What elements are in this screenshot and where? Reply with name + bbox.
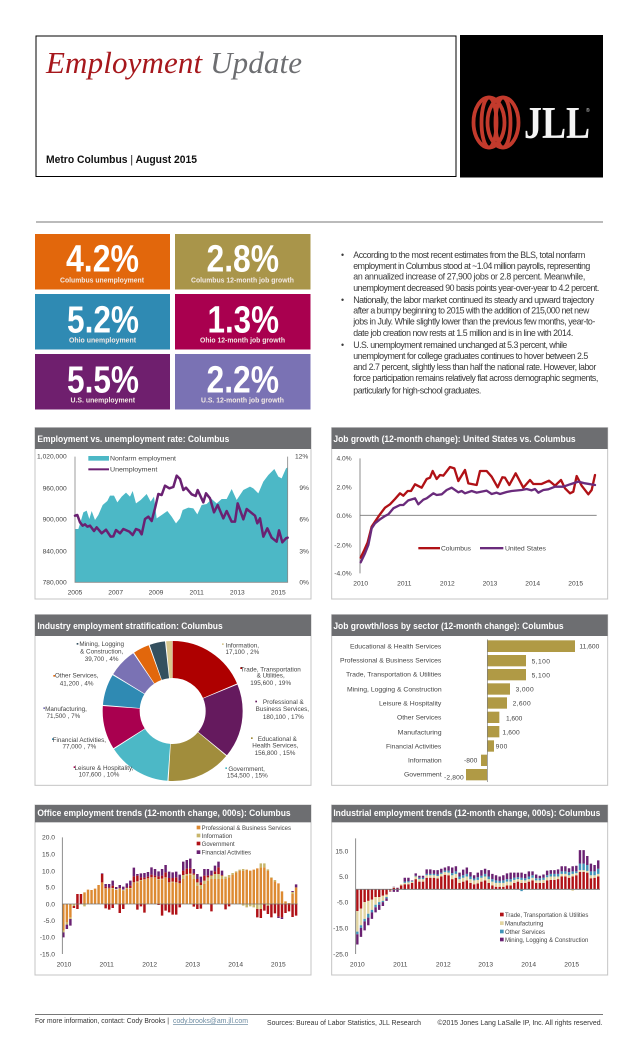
value labels: -800	[464, 758, 478, 765]
right axis labels: 9%	[299, 485, 309, 492]
sector labels: Other Services	[397, 715, 442, 722]
footer copyright: ©2015 Jones Lang LaSalle IP, Inc. All rights reserved.	[438, 1019, 603, 1027]
heading	[35, 428, 311, 449]
area and line chart	[75, 457, 288, 582]
JLL logo	[460, 35, 603, 178]
value labels: 5,100	[532, 658, 550, 665]
value labels: 5,100	[532, 672, 550, 679]
heading	[35, 615, 311, 636]
summary bullet text: jobs in July. While slightly lower than the previous few months, year-to-	[352, 317, 595, 327]
donut labels: Health Services,	[252, 743, 299, 750]
y axis labels: 5.0	[46, 885, 55, 892]
stacked bar chart	[63, 859, 296, 937]
year labels	[350, 962, 579, 969]
top divider	[36, 222, 603, 223]
donut labels: 195,600 , 19%	[250, 680, 291, 687]
y axis labels	[40, 835, 55, 958]
legend: United States	[505, 546, 547, 553]
KPI: Columbus unemployment: Columbus unemployment	[60, 277, 145, 284]
legend	[88, 456, 176, 474]
summary bullet text: and 2.7 percent, slightly less than half the national rate. However, labor	[353, 362, 596, 372]
axes	[62, 837, 298, 954]
donut labels: Mining, Logging	[79, 641, 124, 648]
KPI: Ohio 12-month job growth: Ohio 12-month job growth	[200, 337, 285, 344]
legend: Professional & Business Services	[202, 825, 292, 832]
KPI: Columbus 12-month job growth: Columbus 12-month job growth	[191, 277, 294, 284]
donut labels: 180,100 , 17%	[263, 714, 304, 721]
year labels: 2009	[149, 590, 164, 597]
KPI: U.S. 12-month job growth: U.S. 12-month job growth	[201, 398, 284, 404]
year labels: 2015	[568, 581, 583, 588]
heading: Office employment trends (12-month change, 000s): Columbus	[37, 808, 291, 818]
footer contact: For more information, contact: Cody Brooks |	[35, 1018, 169, 1025]
donut labels	[43, 641, 309, 780]
donut labels: Financial Activities,	[53, 737, 106, 744]
year labels: 2007	[108, 590, 123, 597]
panel: industry employment stratification	[35, 615, 311, 785]
summary bullet text: According to the most recent estimates from the BLS, total nonfarm	[353, 250, 585, 260]
year labels: 2012	[142, 962, 157, 969]
summary bullet text: unemployment decreased 90 basis points year-over-year to 4.2 percent.	[353, 283, 599, 293]
summary bullet text: Nationally, the labor market continued its steady and upward trajectory	[353, 295, 595, 305]
y axis labels: -5.0	[337, 900, 349, 907]
KPI: Columbus 12-month job growth: 2.8%	[206, 239, 279, 281]
right axis labels: 3%	[299, 548, 309, 555]
title: Employment Update	[45, 45, 302, 80]
year labels: 2014	[521, 962, 536, 969]
KPI: Ohio 12-month job growth	[175, 294, 310, 350]
donut labels: Professional &	[263, 699, 305, 706]
y axis labels: 4.0%	[336, 456, 352, 463]
donut labels: 77,000 , 7%	[62, 744, 97, 751]
KPI: Columbus unemployment: 4.2%	[66, 239, 139, 281]
year labels: 2015	[271, 590, 286, 597]
left axis labels: 1,020,000	[37, 453, 67, 460]
sector labels: Information	[408, 758, 442, 765]
year labels	[353, 581, 583, 588]
KPI: U.S. unemployment	[35, 354, 170, 410]
summary bullet text: unemployment for college graduates continues to hover between 2.5	[353, 351, 588, 361]
legend: Manufacturing	[505, 921, 544, 928]
KPI: Columbus 12-month job growth	[175, 234, 310, 290]
right axis labels	[295, 453, 309, 587]
legend: Columbus	[441, 546, 472, 553]
heading: Industrial employment trends (12-month change, 000s): Columbus	[333, 808, 600, 818]
donut labels: Leisure & Hospitality,	[75, 765, 134, 772]
value labels: 1,600	[502, 729, 520, 736]
heading	[332, 615, 608, 636]
y axis labels	[334, 456, 352, 578]
KPI: U.S. 12-month job growth: 2.2%	[206, 359, 279, 401]
year labels: 2005	[68, 590, 83, 597]
y axis labels: -15.0	[333, 926, 349, 933]
summary bullet text: employment in Columbus stood at ~1.04 million payrolls, representing	[353, 261, 590, 271]
legend: Information	[202, 833, 233, 840]
summary bullet text: after a bumpy beginning to 2015 with the addition of 215,000 net new	[353, 306, 590, 316]
y axis labels: 15.0	[335, 848, 349, 855]
legend: Unemployment	[110, 467, 157, 474]
year labels: 2011	[397, 581, 412, 588]
sector labels: Mining, Logging & Construction	[347, 687, 442, 694]
summary bullet text: U.S. unemployment remained unchanged at 5.3 percent, while	[353, 340, 567, 350]
subtitle: Metro Columbus | August 2015	[46, 154, 197, 166]
legend	[418, 546, 547, 553]
value labels: 2,600	[513, 700, 531, 707]
header box with title	[36, 36, 456, 176]
year labels: 2014	[228, 962, 243, 969]
y axis labels: -25.0	[333, 951, 349, 958]
heading: Job growth/loss by sector (12-month change): Columbus	[333, 621, 564, 631]
value labels: -2,800	[444, 774, 464, 781]
summary bullet text: •	[341, 295, 344, 305]
axes	[356, 838, 600, 954]
panel: job growth/loss by sector	[332, 615, 608, 785]
y axis labels: 0.0	[46, 901, 55, 908]
horizontal bar chart	[466, 639, 575, 782]
sector labels: Educational & Health Services	[350, 644, 442, 651]
summary bullet text	[341, 250, 599, 395]
sector labels: Leisure & Hospitality	[379, 701, 442, 708]
donut labels: & Utilities,	[257, 673, 285, 680]
y axis labels: 5.0	[339, 874, 349, 881]
footer sources: Sources: Bureau of Labor Statistics, JLL Research	[267, 1020, 421, 1027]
donut labels: 39,700 , 4%	[85, 656, 119, 663]
sector labels	[340, 644, 442, 779]
y axis labels: 20.0	[42, 835, 55, 842]
JLL logo: ®	[586, 107, 590, 114]
legend: Government	[202, 841, 235, 848]
summary bullet text: date job creation now rests at 1.5 million and is in line with 2014.	[353, 328, 573, 338]
panel: employment vs unemployment rate	[35, 428, 311, 599]
left axis labels: 840,000	[43, 548, 67, 555]
donut labels: Business Services,	[256, 706, 309, 713]
y axis labels: 2.0%	[336, 485, 352, 492]
panel: industrial employment trends	[332, 805, 608, 975]
y axis labels: -15.0	[40, 951, 55, 958]
year labels	[68, 590, 286, 597]
legend: Other Services	[505, 929, 546, 936]
donut labels: 154,500 , 15%	[227, 773, 268, 780]
line chart	[360, 458, 597, 573]
year labels: 2013	[185, 962, 200, 969]
KPI: Ohio unemployment: 5.2%	[67, 299, 139, 341]
right axis labels: 0%	[299, 580, 309, 587]
donut labels: Government,	[228, 766, 265, 773]
heading: Job growth (12-month change): United States vs. Columbus	[333, 434, 576, 444]
footer contact: cody.brooks@am.jll.com	[173, 1018, 248, 1025]
donut labels: Trade, Transportation	[241, 666, 301, 673]
KPI: U.S. unemployment: U.S. unemployment	[70, 398, 136, 404]
legend: Mining, Logging & Construction	[505, 937, 589, 944]
legend: Nonfarm employment	[110, 456, 176, 463]
KPI: Ohio unemployment: Ohio unemployment	[69, 337, 137, 344]
y axis labels: -2.0%	[334, 542, 352, 549]
value labels: 11,600	[579, 644, 600, 651]
donut labels: Information,	[226, 642, 259, 649]
year labels: 2010	[350, 962, 365, 969]
left axis labels: 960,000	[43, 486, 67, 493]
y axis labels: 0.0%	[336, 513, 352, 520]
left axis labels: 900,000	[43, 516, 67, 523]
heading	[35, 805, 311, 822]
donut labels: & Construction,	[80, 649, 124, 656]
year labels: 2015	[271, 962, 286, 969]
summary bullet text: force participation remains relatively flat across demographic segments,	[353, 373, 598, 383]
sector labels: Financial Activities	[386, 744, 442, 751]
legend: Trade, Transportation & Utilities	[505, 912, 589, 919]
heading: Employment vs. unemployment rate: Columbus	[37, 434, 229, 444]
heading	[332, 805, 608, 822]
year labels: 2015	[564, 962, 579, 969]
year labels: 2012	[440, 581, 455, 588]
summary bullet text: particularly for high-school graduates.	[353, 385, 481, 395]
donut labels: 17,100 , 2%	[225, 649, 260, 656]
JLL logo: JLL	[524, 98, 590, 148]
footer contact	[35, 1018, 248, 1025]
year labels: 2013	[483, 581, 498, 588]
year labels: 2013	[230, 590, 245, 597]
right axis labels: 6%	[299, 517, 309, 524]
y axis labels: -4.0%	[334, 571, 352, 578]
year labels: 2011	[190, 590, 204, 597]
year labels	[57, 962, 286, 969]
KPI: U.S. unemployment: 5.5%	[67, 359, 139, 401]
footer divider	[35, 1014, 603, 1015]
legend	[197, 825, 292, 857]
stacked bar chart	[357, 850, 598, 945]
panel: job growth US vs Columbus	[332, 428, 608, 599]
left axis labels	[37, 453, 67, 587]
donut labels: Educational &	[258, 736, 298, 743]
sector labels: Manufacturing	[398, 729, 442, 736]
KPI: U.S. 12-month job growth	[175, 354, 310, 410]
KPI: Columbus unemployment	[35, 234, 170, 290]
value labels: 900	[496, 743, 508, 750]
sector labels: Government	[404, 772, 442, 779]
KPI: Ohio unemployment	[35, 294, 170, 350]
y axis labels: 15.0	[42, 852, 55, 859]
left axis labels: 780,000	[43, 580, 67, 587]
year labels: 2012	[436, 962, 451, 969]
value labels: 3,000	[516, 686, 534, 693]
donut labels: Other Services,	[55, 673, 99, 680]
donut labels: 156,800 , 15%	[255, 750, 296, 757]
summary bullet text: •	[341, 250, 344, 260]
donut chart	[121, 659, 224, 762]
donut labels: 41,200 , 4%	[60, 681, 94, 688]
y axis labels: -10.0	[40, 935, 55, 942]
sector labels: Trade, Transportation & Utilities	[346, 672, 442, 679]
summary bullet text: •	[341, 340, 344, 350]
donut labels: 107,600 , 10%	[79, 772, 120, 779]
y axis labels	[333, 848, 349, 958]
heading: Industry employment stratification: Columbus	[37, 621, 223, 631]
donut labels: 71,500 , 7%	[46, 713, 81, 720]
legend: Financial Activities	[202, 850, 252, 857]
value labels: 1,600	[506, 715, 523, 722]
year labels: 2014	[525, 581, 540, 588]
KPI: Ohio 12-month job growth: 1.3%	[208, 299, 279, 341]
panel: office employment trends	[35, 805, 311, 975]
y axis labels: -5.0	[44, 918, 55, 925]
value labels	[444, 644, 600, 781]
donut labels: Manufacturing,	[45, 706, 87, 713]
right axis labels: 12%	[295, 453, 308, 460]
heading	[332, 428, 608, 449]
year labels: 2011	[393, 962, 408, 969]
summary bullet text: an annualized increase of 27,900 jobs or 2.8 percent. Meanwhile,	[353, 272, 585, 282]
year labels: 2013	[478, 962, 493, 969]
legend	[500, 912, 589, 944]
year labels: 2010	[353, 581, 368, 588]
year labels: 2011	[100, 962, 114, 969]
year labels: 2010	[57, 962, 72, 969]
sector labels: Professional & Business Services	[340, 658, 442, 665]
y axis labels: 10.0	[42, 868, 55, 875]
